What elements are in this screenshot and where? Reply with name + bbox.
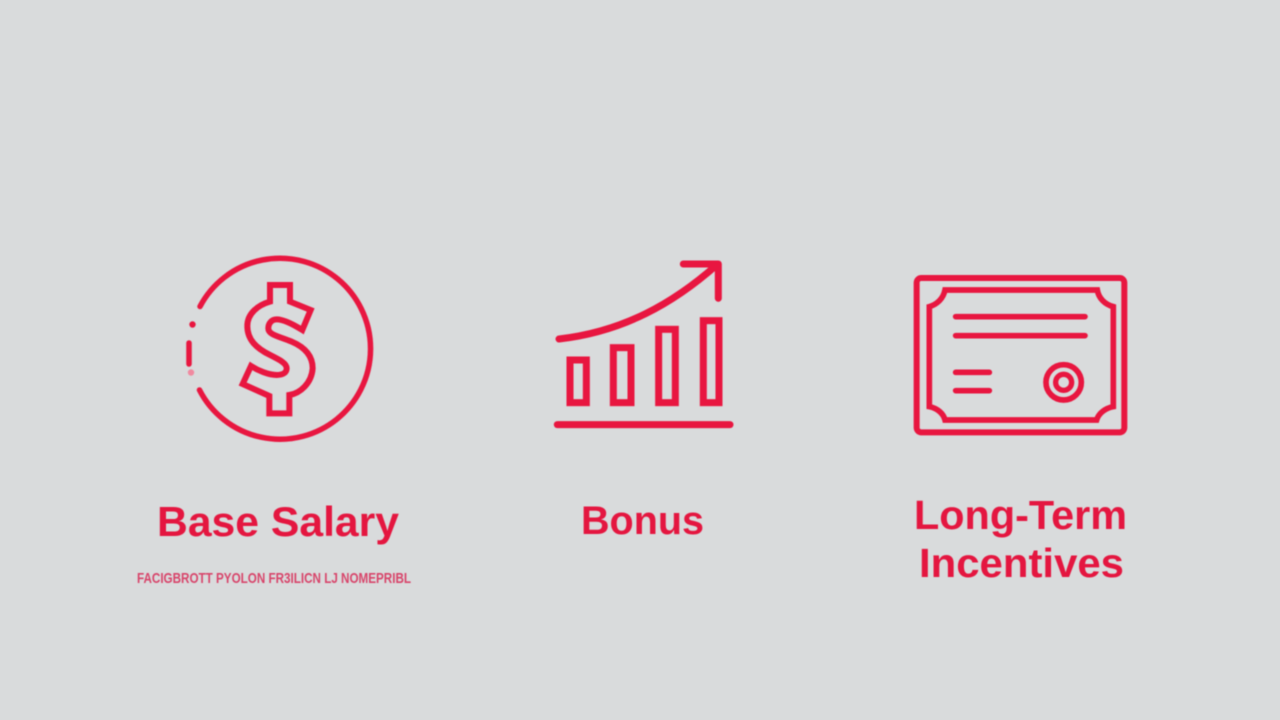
bar 2	[613, 348, 631, 403]
heading: bonus: Bonus	[581, 499, 704, 543]
certificate inner border	[929, 290, 1113, 420]
bar 4	[703, 321, 719, 403]
caption: garbled small text: FACIGBROTT PYOLON FR3ILICN LJ NOMEPRIBL	[137, 570, 411, 587]
bar 3	[659, 329, 675, 403]
heading: base salary: Base Salary	[157, 498, 400, 545]
trend arrow	[559, 264, 718, 339]
baseline	[557, 414, 730, 435]
bar 1	[570, 360, 586, 403]
panel: bonus	[557, 264, 730, 543]
certificate outer frame	[917, 278, 1124, 432]
panel: long-term incentives	[914, 278, 1127, 586]
certificate seal	[1046, 365, 1081, 400]
heading: long-term incentives: Long-Term	[914, 492, 1127, 538]
icon: dollar coin	[188, 258, 371, 439]
panel: base salary	[137, 258, 411, 587]
certificate text lines	[956, 317, 1085, 391]
heading: long-term incentives	[914, 492, 1127, 586]
icon: stock certificate	[917, 278, 1124, 432]
icon: rising bar chart with arrow	[557, 264, 730, 425]
heading: long-term incentives: Incentives	[919, 540, 1124, 586]
